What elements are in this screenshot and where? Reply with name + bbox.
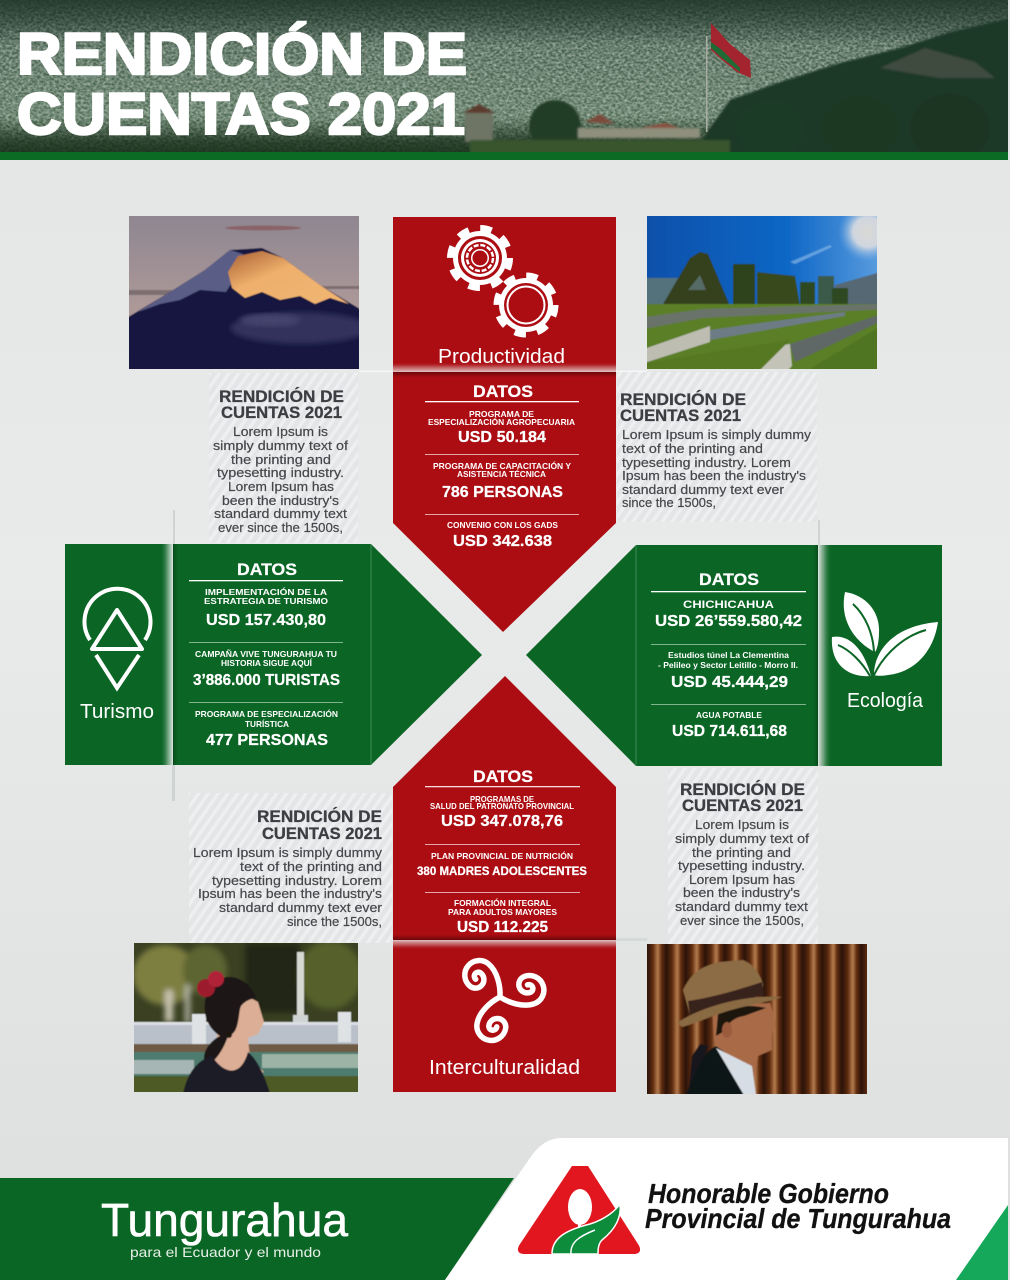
datos block xyxy=(417,767,587,936)
text block: bottom left: Lorem Ipsum is simply dummy xyxy=(193,845,383,860)
datos block: PROGRAMAS DE xyxy=(470,794,534,804)
text block: top left: the printing and xyxy=(231,452,331,467)
logo text: Provincial de Tungurahua xyxy=(645,1203,951,1234)
title: CUENTAS 2021 xyxy=(17,82,465,147)
text block: bottom left: text of the printing and xyxy=(240,859,382,874)
text block: top left: ever since the 1500s, xyxy=(218,520,343,535)
icon: gears xyxy=(451,229,555,334)
text block: top right: Ipsum has been the industry's xyxy=(622,468,807,483)
panel: ecologia (green banner) xyxy=(526,520,942,766)
datos block: USD 50.184 xyxy=(458,429,546,446)
photo: snow volcano at sunset xyxy=(129,216,359,369)
text block: top right: RENDICIÓN DE xyxy=(620,390,746,409)
text block: bottom left: RENDICIÓN DE xyxy=(257,807,382,826)
datos block: PARA ADULTOS MAYORES xyxy=(448,907,557,917)
text block: bottom right xyxy=(668,768,818,944)
text block: bottom right: Lorem Ipsum has xyxy=(689,872,796,887)
datos block: 786 PERSONAS xyxy=(442,484,563,501)
datos block: DATOS xyxy=(473,767,533,786)
datos block: Estudios túnel La Clementina xyxy=(668,650,789,660)
text block: bottom left: standard dummy text ever xyxy=(219,900,383,915)
datos block: PROGRAMA DE CAPACITACIÓN Y xyxy=(433,460,571,471)
datos block: USD 347.078,76 xyxy=(441,813,563,830)
text block: bottom right: CUENTAS 2021 xyxy=(682,796,803,815)
text block: bottom left: typesetting industry. Lorem xyxy=(212,873,382,888)
photo: plant sculpture park xyxy=(647,216,877,369)
label: Interculturalidad: Interculturalidad xyxy=(429,1057,580,1079)
title xyxy=(17,22,467,147)
text block: bottom left xyxy=(189,793,392,943)
logo text: Honorable Gobierno xyxy=(648,1178,889,1209)
panel: turismo (green banner) xyxy=(65,510,482,801)
datos block: AGUA POTABLE xyxy=(696,710,762,720)
datos block: FORMACIÓN INTEGRAL xyxy=(454,897,551,908)
logo: provincial emblem xyxy=(518,1166,640,1254)
datos block xyxy=(651,570,806,740)
text block: bottom right: standard dummy text xyxy=(675,899,808,914)
text block: top left: standard dummy text xyxy=(214,506,347,521)
header photo: valley with flag xyxy=(0,0,1010,162)
datos block: IMPLEMENTACIÓN DE LA xyxy=(205,586,327,597)
panel: productividad (red banner) xyxy=(359,217,647,632)
text block: top right: typesetting industry. Lorem xyxy=(622,455,791,470)
text block: top left: been the industry's xyxy=(222,493,340,508)
datos block: CAMPAÑA VIVE TUNGURAHUA TU xyxy=(195,649,337,659)
title: RENDICIÓN DE xyxy=(17,22,467,87)
datos block: USD 157.430,80 xyxy=(206,612,326,629)
text block: bottom right: typesetting industry. xyxy=(678,858,805,873)
datos block: HISTORIA SIGUE AQUÍ xyxy=(221,657,313,668)
text block: bottom right: simply dummy text of xyxy=(675,831,809,846)
datos block: USD 714.611,68 xyxy=(672,723,787,740)
datos block: DATOS xyxy=(699,570,759,589)
datos block: PLAN PROVINCIAL DE NUTRICIÓN xyxy=(431,850,573,861)
footer green corner xyxy=(956,1205,1008,1280)
header green bar xyxy=(0,152,1008,160)
text block: top right: text of the printing and xyxy=(622,441,763,456)
panel: interculturalidad (red banner) xyxy=(358,676,647,1092)
footer green band xyxy=(0,1178,514,1280)
datos block: CHICHICAHUA xyxy=(683,599,774,611)
footer white panel xyxy=(445,1138,1008,1280)
icon: mountain location pin xyxy=(84,589,150,688)
text block: top right: since the 1500s, xyxy=(622,495,716,510)
datos block: 380 MADRES ADOLESCENTES xyxy=(417,864,587,878)
text block: top right: standard dummy text ever xyxy=(622,482,785,497)
datos block xyxy=(425,382,579,550)
datos block: CONVENIO CON LOS GADS xyxy=(447,520,558,530)
datos block: SALUD DEL PATRONATO PROVINCIAL xyxy=(430,801,574,811)
text block: top right: CUENTAS 2021 xyxy=(620,406,741,425)
text block: bottom left: Ipsum has been the industry's xyxy=(198,886,383,901)
logo text xyxy=(645,1178,951,1234)
icon: flag xyxy=(711,23,751,78)
text block: top left: RENDICIÓN DE xyxy=(219,387,344,406)
label: Productividad: Productividad xyxy=(438,346,565,368)
datos block: USD 342.638 xyxy=(453,533,552,550)
text block: top right xyxy=(617,372,817,522)
datos block: - Pelileo y Sector Leitillo - Morro II. xyxy=(658,660,798,670)
text block: bottom right: the printing and xyxy=(692,845,791,860)
text block: bottom right: RENDICIÓN DE xyxy=(680,780,805,799)
datos block: ESPECIALIZACIÓN AGROPECUARIA xyxy=(428,416,575,427)
photo: man with felt hat xyxy=(647,944,867,1094)
footer slogan: Tungurahua xyxy=(101,1194,348,1246)
label: Turismo: Turismo xyxy=(80,701,154,723)
text block: top right: Lorem Ipsum is simply dummy xyxy=(622,427,812,442)
text block: bottom right: ever since the 1500s, xyxy=(680,913,804,928)
datos block: PROGRAMA DE ESPECIALIZACIÓN xyxy=(195,708,338,719)
footer slogan: para el Ecuador y el mundo xyxy=(130,1244,321,1260)
text block: bottom right: been the industry's xyxy=(683,885,801,900)
datos block: 3’886.000 TURISTAS xyxy=(193,672,340,689)
icon: triskelion spirals xyxy=(459,955,548,1043)
datos block: DATOS xyxy=(237,560,297,579)
label: Ecología: Ecología xyxy=(847,690,924,712)
text block: bottom left: since the 1500s, xyxy=(287,914,382,929)
icon: leaves xyxy=(832,592,938,676)
text block: bottom right: Lorem Ipsum is xyxy=(695,817,790,832)
text block: top left: CUENTAS 2021 xyxy=(221,403,342,422)
datos block: USD 45.444,29 xyxy=(671,674,788,691)
text block: top left: typesetting industry. xyxy=(217,465,344,480)
datos block: 477 PERSONAS xyxy=(206,732,328,749)
datos block: PROGRAMA DE xyxy=(469,409,534,419)
datos block: TURÍSTICA xyxy=(245,718,289,729)
datos block: USD 112.225 xyxy=(457,919,548,936)
text block: top left: Lorem Ipsum has xyxy=(228,479,335,494)
text block: bottom left: CUENTAS 2021 xyxy=(262,824,382,843)
text block: top left: simply dummy text of xyxy=(213,438,348,453)
datos block: ASISTENCIA TÉCNICA xyxy=(457,468,546,479)
datos block: ESTRATEGIA DE TURISMO xyxy=(204,596,329,606)
text block: top left: Lorem Ipsum is xyxy=(233,424,329,439)
datos block xyxy=(189,560,343,749)
datos block: DATOS xyxy=(473,382,533,401)
datos block: USD 26’559.580,42 xyxy=(655,613,802,630)
text block: top left xyxy=(209,373,358,543)
photo: woman in a park xyxy=(134,943,358,1092)
